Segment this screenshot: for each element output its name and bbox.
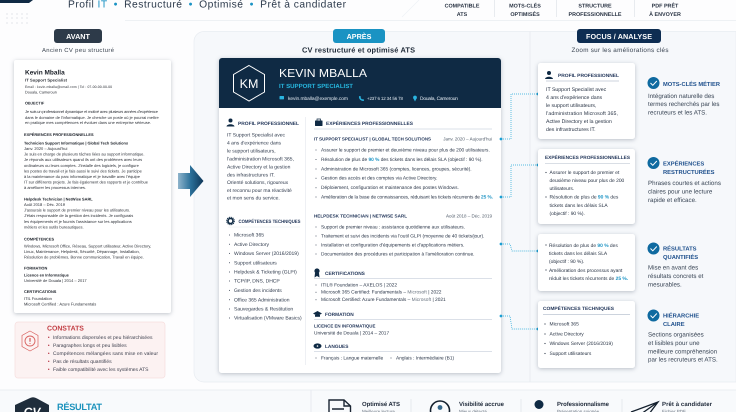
focus card: profil professionnel: 4 ans d'expérience dans [546,95,602,101]
footer: visibilité accrue: Visibilité accrue [459,401,505,408]
header: feature labels: PDF PRÊT [652,2,679,10]
panel: ancien CV: Kevin Mballa [25,70,65,76]
focus card: expériences professionnelles: tickets dans les délais SLA [550,203,608,209]
section: expériences professionnelles: EXPÉRIENCES PROFESSIONNELLES [326,120,414,127]
section: compétences techniques: TCP/IP, DNS, DHCP [234,279,280,285]
badge: avant: AVANT [66,32,90,41]
header: feature labels: ATS [457,12,468,18]
section: compétences techniques: Gestion des incidents [234,288,282,294]
section: compétences techniques [227,217,302,322]
section: certifications: CERTIFICATIONS [325,271,366,277]
focus card: profil professionnel: le support utilisateurs, [546,103,596,109]
feature: résultats quantifiés [648,242,704,288]
section: compétences techniques: Support utilisateurs [234,260,277,266]
section: certifications [314,268,492,303]
feature: hiérarchie claire: par les recruteurs et ATS. [648,356,718,364]
icon: gear [227,217,234,225]
section: expériences professionnelles: Résolution de plus de 90 % des tickets dans les délais SLA (objectif : 90 %). [321,157,483,163]
feature: expériences restructurées: rapide et efficace. [648,197,697,204]
section: compétences techniques: Sauvegardes & Restitution [234,307,293,313]
section: profil professionnel: Active Directory et la gestion [227,164,291,170]
focus card: profil professionnel [538,63,635,139]
header: feature labels: COMPATIBLE [445,4,480,10]
panel: CV optimisé [219,58,501,373]
panel: ancien CV: Email : kevin.mballa@email.com | Tel : 07-00-00-00-00 [25,85,112,89]
feature: expériences restructurées: EXPÉRIENCES [663,160,704,168]
panel: constats [15,322,165,378]
subtitle: focus: Zoom sur les améliorations clés [572,47,668,54]
panel: constats: Pas de résultats quantifiés [53,359,112,365]
section: certifications: Microsoft 365 Certified: Fundamentals – Microsoft | 2022 [321,290,442,296]
panel: ancien CV: Microsoft Certified : Azure Fundamentals [24,302,96,307]
header: feature labels: STRUCTURE [578,4,612,10]
panel: ancien CV: Août 2018 – Déc. 2019 [24,202,66,207]
subtitle: après: CV restructuré et optimisé ATS [302,46,415,54]
panel: ancien CV: les postes de travail et je fais aussi le suivi des tickets. Je participe [24,168,143,173]
panel: ancien CV: Licence en Informatique [24,272,70,278]
feature: expériences restructurées: RESTRUCTURÉES [663,168,715,176]
panel: ancien CV: en pratique mes compétences et évoluer dans une entreprise sérieuse. [25,120,151,125]
icon: KM hexagon: KM [240,77,258,91]
section: profil professionnel: Orienté solutions, rigoureux [227,180,289,186]
footer: visibilité accrue [430,401,505,412]
panel: ancien CV: Je suis un professionnel dynamique et motivé avec plusieurs années d'expérience [25,109,159,114]
section: expériences professionnelles: IT SUPPORT SPECIALIST | GLOBAL TECH SOLUTIONS [314,136,431,142]
header: feature labels: OPTIMISÉS [510,11,540,18]
section: profil professionnel: des infrastructures IT. [227,172,275,178]
section: expériences professionnelles: Amélioration de la base de connaissances, réduisant les tickets récurrents de 25 %. [321,194,493,200]
section: expériences professionnelles: Administration de Microsoft 365 (comptes, licences, groupes, sécurité). [321,166,472,172]
panel: ancien CV: OBJECTIF [25,100,45,105]
icon: check [648,157,660,169]
CV header band: KEVIN MBALLA [279,67,367,80]
feature: résultats quantifiés: QUANTIFIÉS [663,253,698,261]
panel: ancien CV: Helpdesk Technician | NetWise SARL [24,196,93,201]
header: feature labels: À ENVOYER [649,11,681,18]
focus card: résultats: réduit les tickets récurrents de 25 %. [549,276,629,282]
panel: ancien CV: Linux, Maintenance, Helpdesk, Sécurité, Dépannage, Installation, [24,249,140,254]
focus card: expériences professionnelles: Assurer le support de premier et [550,170,620,176]
focus card: compétences techniques [538,301,635,368]
section: profil professionnel: 4 ans d'expérience dans [227,140,282,146]
badge: avant [54,29,102,43]
panel: ancien CV: Janv. 2020 – Aujourd'hui [24,146,68,151]
icon: alert hexagon [22,331,38,351]
focus card: compétences techniques: Microsoft 365 [550,322,579,328]
panel: ancien CV: métiers et les outils bureautiques. [24,224,84,230]
icon: medal [314,268,320,278]
panel: après and focus background [194,32,736,382]
icon: graduation cap [313,311,322,317]
feature: résultats quantifiés: mesurables. [648,282,682,288]
panel: ancien CV: à améliorer les processus internes. [24,185,86,190]
panel: ancien CV: IT sur différents projets. Je fais également des rapports et je contribue [24,180,149,184]
section: profil professionnel: PROFIL PROFESSIONNEL [238,121,299,127]
badge: focus: FOCUS / ANALYSE [586,32,652,41]
section: compétences techniques: Active Directory [234,242,270,248]
panel: constats: Paragraphes longs et peu lisibles [53,343,127,349]
footer: prêt à candidater [631,401,713,412]
icon: target [430,401,450,412]
panel: ancien CV: J'étais responsable de la gestion des incidents. Je configurais [24,213,133,218]
panel: ancien CV: Windows, Microsoft Office, Réseau, Support utilisateur, Active Directory, [24,243,151,248]
panel: ancien CV: ITIL Foundation [24,296,52,301]
focus card: compétences techniques: Windows Server (2016/2019) [550,341,613,347]
header: feature labels [445,0,681,18]
section: profil professionnel: IT Support Specialist avec [227,133,285,139]
section: profil professionnel: l'administration Microsoft 365, [227,156,294,162]
section: compétences techniques: Helpdesk & Ticketing (GLPI) [234,270,297,276]
panel: ancien CV: dans le domaine de l'informatique. Je cherche un poste où je pourrai mettre [25,115,160,120]
icon: speech bubble [314,343,322,349]
footer: optimisé ATS [329,400,400,412]
section: expériences professionnelles: Installation et configuration d'équipements et d'applications métiers. [321,242,464,248]
focus card: profil professionnel: l'administration Microsoft 365, [546,111,618,117]
focus card: résultats [538,234,635,291]
section: expériences professionnelles [314,119,493,258]
focus card: résultats: Amélioration des processus ayant [549,268,623,274]
panel: ancien CV: COMPÉTENCES [24,236,54,241]
panel: ancien CV: les équipements et je fournis l'assistance sur les applications [24,219,132,224]
section: langues: Anglais : Intermédiaire (B1) [396,356,455,362]
focus card: profil professionnel: Active Directory et la gestion [546,119,612,125]
badge: focus [577,29,661,43]
panel: ancien CV: Technicien Support Informatique | Global Tech Solutions [24,140,128,146]
focus card: profil professionnel: IT Support Specialist avec [546,87,607,93]
focus card: résultats: Résolution de plus de 90 % des [549,243,618,249]
focus card: expériences professionnelles: utilisateurs. [550,186,574,192]
focus card: expériences professionnelles: EXPÉRIENCES PROFESSIONNELLES [545,154,630,160]
panel: ancien CV: Résolution de problèmes, Bonne communication, Travail en équipe. [24,255,144,260]
feature: hiérarchie claire: et lisibles pour une [648,340,700,347]
focus card: profil professionnel: des infrastructures IT. [546,127,596,133]
CV header band: Douala, Cameroun [420,96,458,102]
icon: check [648,77,660,89]
section: profil professionnel [226,118,299,202]
section: compétences techniques: Windows Server (2016/2019) [234,251,299,257]
feature: expériences restructurées: Phrases courtes et actions [648,180,721,187]
feature: expériences restructurées [648,157,721,204]
section: expériences professionnelles: HELPDESK TECHNICIAN | NETWISE SARL [314,214,407,218]
section: langues: Français : Langue maternelle [321,356,383,362]
section: expériences professionnelles: Août 2018 – Déc. 2019 [446,214,492,218]
focus card: expériences professionnelles: (objectif : 90 %). [550,211,585,217]
panel: ancien CV: à la maintenance du parc informatique et je travaille avec l'équipe [24,174,141,179]
section: profil professionnel: et reconnu pour ma réactivité [227,188,292,194]
section: expériences professionnelles: Support de premier niveau : assistance quotidienne aux utilisateurs. [321,224,465,230]
feature: hiérarchie claire [648,310,718,364]
icon: paper plane [631,402,658,412]
arrow: avant to après [178,165,204,197]
section: langues: LANGUES [325,344,349,350]
focus card: expériences professionnelles [538,149,635,224]
focus card: profil professionnel: PROFIL PROFESSIONNEL [558,73,619,78]
panel: ancien CV: IT Support Specialist [25,78,68,82]
feature: expériences restructurées: claires pour une lecture [648,188,713,196]
panel: ancien CV: Université de Douala | 2014 – 2017 [24,278,87,283]
section: formation: LICENCE EN INFORMATIQUE [314,324,375,329]
icon: check [648,242,660,254]
section: formation: FORMATION [325,312,354,318]
feature: résultats quantifiés: RÉSULTATS [663,244,697,252]
icon: person [545,71,553,79]
section: expériences professionnelles: Déploiement, configuration et maintenance des postes Windows. [321,185,459,191]
CV header band: IT SUPPORT SPECIALIST [279,83,353,90]
icon: KM hexagon [234,66,264,101]
section: compétences techniques: Virtualisation (VMware Basics) [234,316,302,322]
feature: mots-clés métier: termes recherchés par les [648,101,720,108]
icon: document [329,400,350,412]
feature: hiérarchie claire: HIÉRARCHIE [663,312,699,320]
footer: résultat title: RÉSULTAT [57,401,102,412]
panel: constats: CONSTATS [47,326,84,332]
feature: hiérarchie claire: CLAIRE [663,321,685,328]
CV header band: +237 6 12 34 56 78 [367,96,403,101]
feature: résultats quantifiés: Mise en avant des [648,264,698,272]
section: formation [313,311,492,336]
decorative dots [6,14,28,24]
icon: check [648,310,660,322]
subtitle: avant: Ancien CV peu structuré [42,47,115,54]
footer: professionnalisme [534,400,610,412]
focus card: résultats: (objectif : 90 %). [549,259,584,265]
panel: ancien CV: FORMATION [24,265,47,270]
panel: constats: Informations dispersées et peu hiérarchisées [53,335,153,341]
section: profil professionnel: le support utilisateurs, [227,148,276,154]
feature: mots-clés métier [648,77,721,116]
footer: prêt à candidater: Prêt à candidater [662,401,713,408]
panel: constats: Compétences mélangées sans mise en valeur [53,351,158,357]
CV header band [219,58,501,108]
panel: constats: Faible compatibilité avec les systèmes ATS [53,367,149,373]
feature: hiérarchie claire: meilleure compréhension [648,348,718,356]
section: compétences techniques: COMPÉTENCES TECHNIQUES [238,218,301,225]
focus card: expériences professionnelles: deuxième niveau pour plus de 200 [550,178,625,184]
feature: mots-clés métier: recruteurs et les ATS. [648,110,707,116]
panel: ancien CV: ordinateurs ou leurs comptes. J'installe des logiciels, je configure [24,163,140,168]
CV header band: kevin.mballa@exemple.com [288,96,348,102]
footer: résultat logo [15,397,49,412]
section: langues [314,343,492,362]
feature: mots-clés métier: Intégration naturelle des [648,93,714,100]
panel: ancien CV: J'assurais le support de premier niveau pour les utilisateurs. [24,208,130,212]
section: expériences professionnelles: Gestion des accès et des comptes via Active Directory. [321,176,437,182]
badge: après [333,29,385,43]
section: certifications: Microsoft Certified: Azure Fundamentals – Microsoft | 2021 [321,297,446,303]
connectors: CV to focus cards [500,93,539,330]
icon: briefcase [315,119,322,126]
section: profil professionnel: et mon sens du service. [227,196,280,202]
panel: ancien CV: EXPÉRIENCES PROFESSIONNELLES [24,132,94,137]
badge: après: APRÈS [347,32,372,41]
panel: ancien CV: Je suis en charge de plusieurs tâches liées au support informatique. [24,152,145,156]
footer: professionnalisme: Professionnalisme [557,401,610,408]
footer band [0,390,736,412]
panel: ancien CV: Douala, Cameroun [25,90,57,94]
section: expériences professionnelles: Assurer le support de premier et deuxième niveau pour plus de 200 utilisateurs. [321,148,490,154]
header: feature labels: MOTS-CLÉS [509,2,541,10]
panel: ancien CV: CERTIFICATIONS [24,289,57,294]
focus card: compétences techniques: Support utilisateurs [550,351,592,357]
section: compétences techniques: Microsoft 365 [234,233,264,239]
focus card: compétences techniques: COMPÉTENCES TECHNIQUES [543,305,614,311]
section: expériences professionnelles: Janv. 2020 – Aujourd'hui [443,136,492,142]
section: certifications: ITIL® Foundation – AXELOS | 2022 [321,282,397,288]
footer: optimisé ATS: Optimisé ATS [362,401,400,408]
focus card: compétences techniques: Active Directory [550,332,584,338]
section: compétences techniques: Office 365 Administration [234,297,290,303]
feature: résultats quantifiés: résultats concrets et [648,273,704,280]
feature: hiérarchie claire: Sections organisées [648,332,704,338]
focus card: expériences professionnelles: Résolution de plus de 90 % des [550,194,619,200]
panel: ancien CV: Je réponds aux utilisateurs quand ils ont des problèmes avec leurs [24,157,142,162]
header: logo tab [0,0,33,3]
section: expériences professionnelles: Documentation des procédures et participation à l'amélioration continue. [321,252,474,258]
feature: mots-clés métier: MOTS-CLÉS MÉTIER [663,80,721,88]
section: expériences professionnelles: Traitement et suivi des incidents via l'outil GLPI (moyenne de 40 tickets/jour). [321,234,484,240]
header: feature labels: PROFESSIONNELLE [568,12,622,18]
section: formation: Université de Douala | 2014 – 2017 [314,330,389,336]
panel: ancien CV [14,60,171,313]
icon: person [226,118,234,126]
focus card: résultats: tickets dans les délais SLA [549,251,608,257]
icon: person [534,400,544,409]
